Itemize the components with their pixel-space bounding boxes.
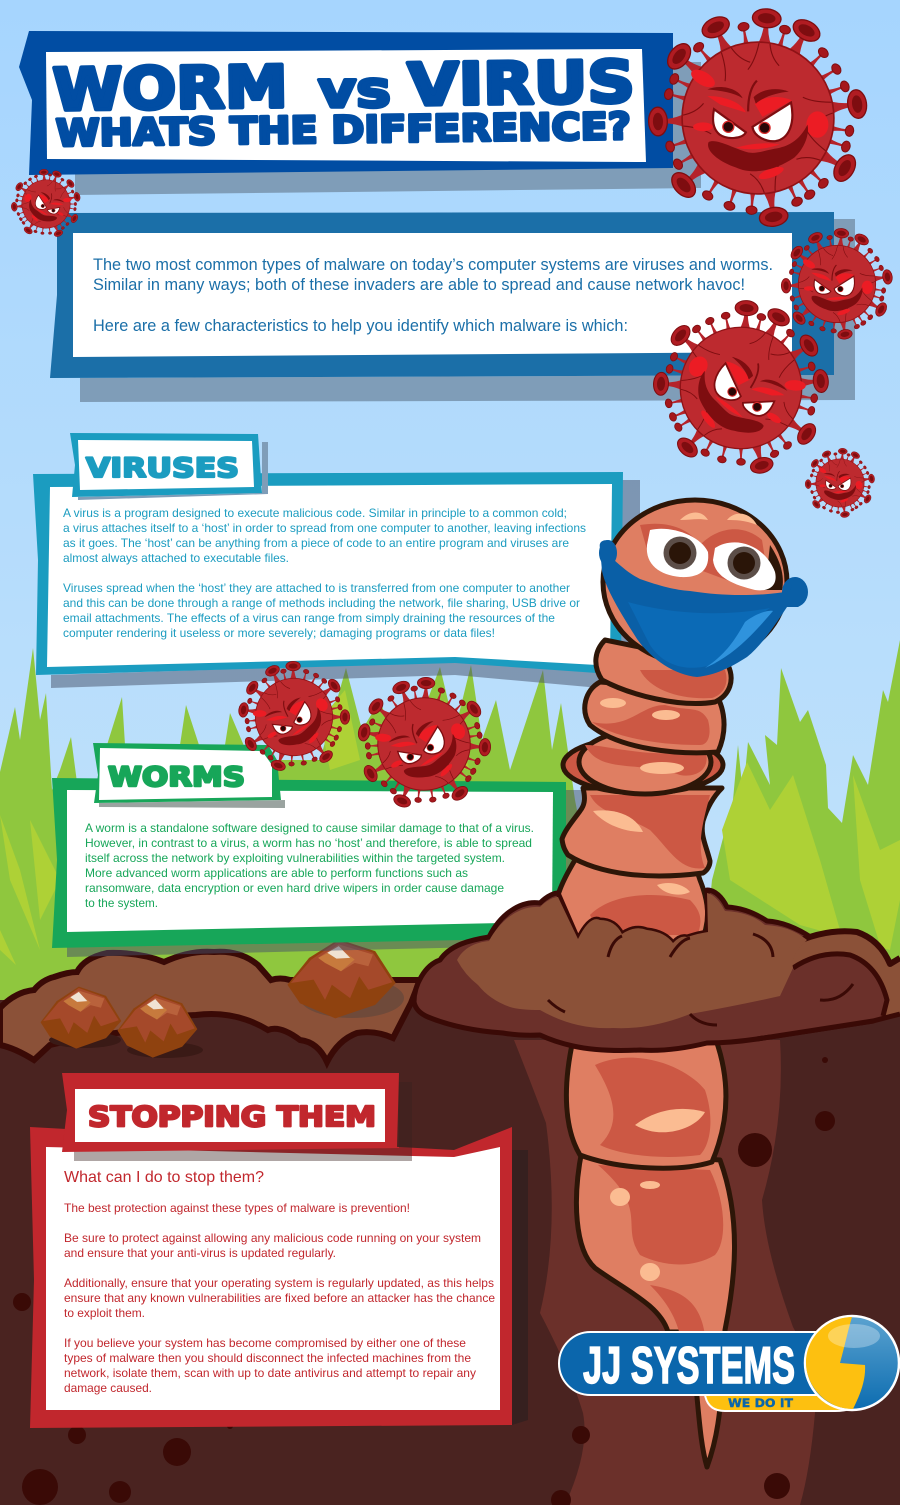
panel: viruses <box>33 433 640 688</box>
intro panel <box>50 212 855 402</box>
worm upper body <box>556 500 808 945</box>
stopping text: network, isolate them, scan with up to date antivirus and attempt to repair any <box>64 1366 476 1380</box>
worm segment 3 <box>579 730 711 794</box>
intro text: The two most common types of malware on today’s computer systems are viruses and worms. <box>93 256 773 274</box>
intro text: Here are a few characteristics to help you identify which malware is which: <box>93 317 628 335</box>
worm segment 2 <box>585 682 724 753</box>
title panel <box>19 31 701 195</box>
title text: vs <box>318 61 391 119</box>
viruses text: A virus is a program designed to execute malicious code. Similar in principle to a common cold; <box>63 506 567 520</box>
panel: stopping them <box>30 1073 528 1428</box>
logo wordmark: JJ SYSTEMS <box>583 1337 795 1395</box>
stopping text <box>64 1169 495 1395</box>
stopping text: Additionally, ensure that your operating system is regularly updated, as this helps <box>64 1276 494 1290</box>
worm head <box>603 500 787 664</box>
worms text: to the system. <box>85 896 158 910</box>
right dirt mound <box>414 890 900 1050</box>
stopping text: What can I do to stop them? <box>64 1169 264 1186</box>
viruses tab: VIRUSES <box>86 453 239 484</box>
worms text: A worm is a standalone software designed to cause similar damage to that of a virus. <box>85 821 534 835</box>
worms tab <box>93 743 285 808</box>
panel: worms <box>52 743 582 957</box>
grass <box>0 640 900 1030</box>
dark soil <box>0 1000 900 1505</box>
worm lower body <box>566 1040 735 1467</box>
rock: middle <box>118 994 203 1058</box>
viruses text: as it goes. The ‘host’ can be anything from a piece of code to an entire program and viruses are <box>63 536 569 550</box>
stopping text: to exploit them. <box>64 1306 145 1320</box>
worm mask <box>599 540 808 677</box>
logo tagline: WE DO IT <box>728 1396 793 1410</box>
viruses text: almost always attached to executable files. <box>63 551 289 565</box>
intro text <box>93 256 773 335</box>
viruses text: and this can be done through a range of methods including the network, file sharing, USB drive or <box>63 596 580 610</box>
virus: above worms right <box>334 654 514 834</box>
worm flare <box>563 737 723 793</box>
worms text: itself across the network by exploiting vulnerabilities within the targeted system. <box>85 851 505 865</box>
stopping text: ensure that any known vulnerabilities are fixed before an attacker has the chance <box>64 1291 495 1305</box>
worm eyes <box>647 529 776 590</box>
viruses tab <box>70 433 268 500</box>
mound right lump <box>757 931 900 1039</box>
virus: small left <box>0 157 93 251</box>
virus: small right <box>805 448 875 518</box>
logo <box>559 1316 899 1411</box>
virus: right of intro <box>781 228 893 340</box>
mound underside <box>414 890 873 1050</box>
stopping text: The best protection against these types of malware is prevention! <box>64 1201 410 1215</box>
virus: large top right <box>648 8 868 228</box>
virus: above worms left <box>217 640 371 794</box>
left dirt mound <box>0 952 420 1062</box>
stopping text: types of malware then you should disconnect the infected machines from the <box>64 1351 471 1365</box>
worm segment 4 <box>562 788 722 876</box>
title text <box>52 48 635 155</box>
stopping tab <box>62 1073 412 1161</box>
title text: WORM <box>52 53 288 124</box>
stopping text: damage caused. <box>64 1381 152 1395</box>
viruses text <box>63 506 586 640</box>
worms tab: WORMS <box>108 762 245 793</box>
viruses text: a virus attaches itself to a ‘host’ in order to spread from one computer to another, leaving infections <box>63 521 586 535</box>
intro text: Similar in many ways; both of these invaders are able to spread and cause network havoc! <box>93 276 745 294</box>
soil tunnel <box>514 1040 815 1505</box>
worms text <box>85 821 534 910</box>
virus: centre right <box>619 266 863 510</box>
stopping tab: STOPPING THEM <box>88 1100 376 1133</box>
stopping text: Be sure to protect against allowing any malicious code running on your system <box>64 1231 481 1245</box>
logo globe <box>805 1316 899 1410</box>
soil spots <box>13 1057 835 1505</box>
rock: left <box>41 987 121 1049</box>
mound top <box>457 893 807 1028</box>
title text: VIRUS <box>407 48 635 119</box>
title text: WHATS THE DIFFERENCE? <box>56 105 631 155</box>
segment below mound <box>566 1040 726 1168</box>
worms text: ransomware, data encryption or even hard drive wipers in order cause damage <box>85 881 504 895</box>
worm segment 1 <box>596 640 731 703</box>
tail segment <box>576 1150 735 1467</box>
viruses text: Viruses spread when the ‘host’ they are attached to is transferred from one computer to another <box>63 581 570 595</box>
viruses text: email attachments. The effects of a virus can range from simply draining the resources of the <box>63 611 555 625</box>
rock: large <box>287 939 404 1018</box>
stopping text: and ensure that your anti-virus is updated regularly. <box>64 1246 336 1260</box>
mound creases <box>548 934 853 1025</box>
worms text: However, in contrast to a virus, a worm has no ‘host’ and therefore, is able to spread <box>85 836 532 850</box>
viruses text: computer rendering it useless or more severely; damaging programs or data files! <box>63 626 495 640</box>
worm segment 5 <box>556 860 708 945</box>
stopping text: If you believe your system has become compromised by either one of these <box>64 1336 466 1350</box>
worms text: More advanced worm applications are able to perform functions such as <box>85 866 468 880</box>
